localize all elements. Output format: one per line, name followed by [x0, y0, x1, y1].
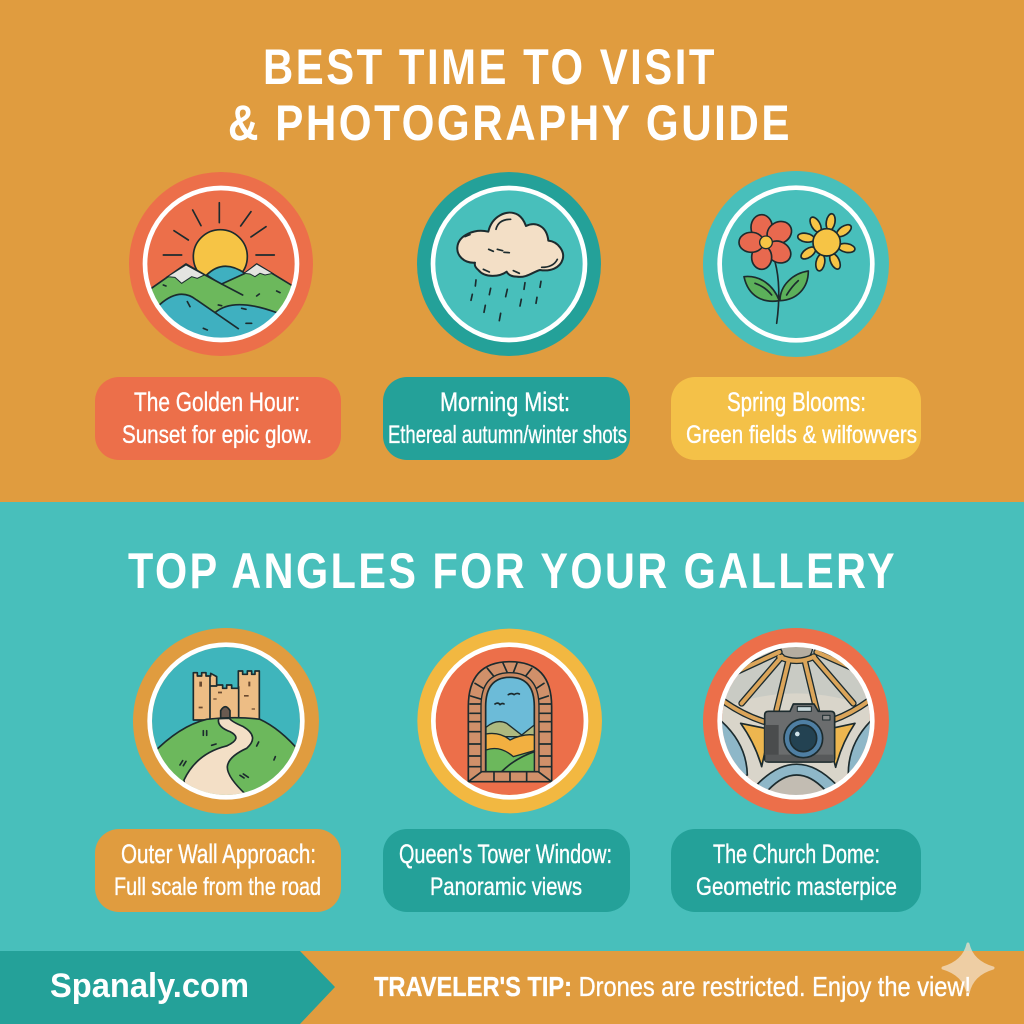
label: the church dome: Geometric masterpice: [696, 873, 897, 901]
footer brand ribbon: Spanaly.com: [50, 967, 249, 1005]
label: outer wall approach: Full scale from the road: [114, 873, 321, 901]
label: spring blooms: [671, 377, 921, 460]
icon: castle on a hill badge: [133, 628, 319, 814]
label: the golden hour: [95, 377, 341, 460]
icon: sparkle: [943, 944, 993, 993]
icon: spring blooms flowers badge: [703, 171, 889, 357]
label: queen's tower window: [383, 829, 630, 912]
label: the church dome: The Church Dome:: [713, 839, 880, 869]
icon: morning mist cloud badge: [417, 172, 601, 356]
title: best time to visit and photography guide: & PHOTOGRAPHY GUIDE: [228, 95, 792, 151]
label: outer wall approach: Outer Wall Approach:: [121, 839, 316, 869]
title: best time to visit and photography guide: [228, 39, 792, 151]
label: the church dome: [671, 829, 921, 912]
label: morning mist: [383, 377, 630, 460]
label: outer wall approach: [95, 829, 341, 912]
panel: top angles: [0, 502, 1024, 951]
icon: golden hour sunset badge: [129, 172, 313, 356]
label: queen's tower window: Panoramic views: [430, 873, 582, 901]
label: spring blooms: Spring Blooms:: [727, 387, 866, 417]
label: queen's tower window: Queen's Tower Window:: [399, 839, 612, 869]
panel: best time to visit: [0, 0, 1024, 502]
footer bar: [0, 951, 1024, 1024]
label: spring blooms: Green fields & wilfowvers: [686, 421, 917, 449]
footer brand ribbon: [0, 951, 335, 1024]
label: morning mist: Morning Mist:: [440, 387, 570, 417]
label: morning mist: Ethereal autumn/winter shots: [388, 421, 627, 449]
title: best time to visit and photography guide: BEST TIME TO VISIT: [263, 39, 717, 95]
icon: church dome camera badge: [703, 628, 889, 814]
icon: tower window badge: [417, 629, 602, 813]
label: the golden hour: Sunset for epic glow.: [122, 421, 312, 449]
label: the golden hour: The Golden Hour:: [134, 387, 300, 417]
